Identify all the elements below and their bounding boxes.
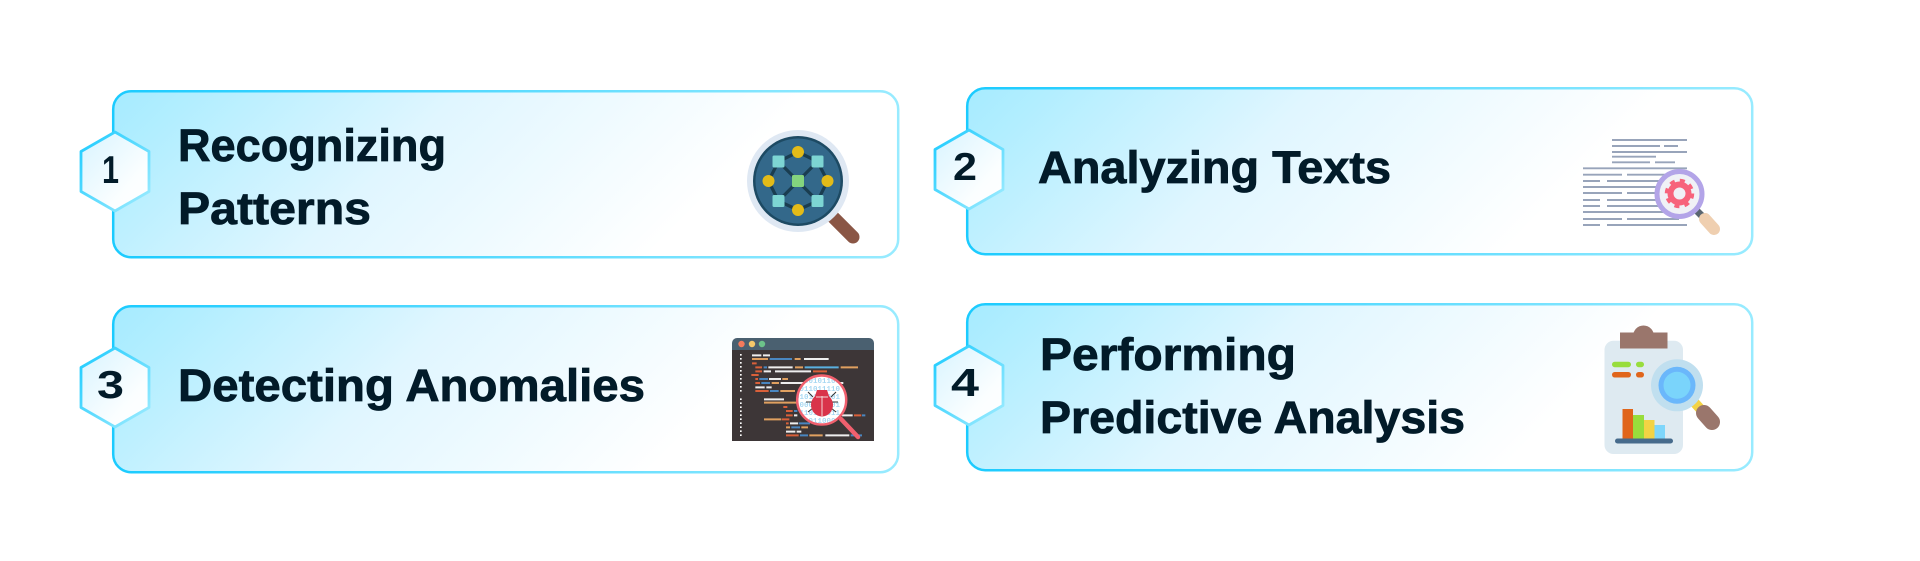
panel: performing predictive analysis — [935, 304, 1752, 470]
number badge 3: 3 — [97, 364, 124, 407]
heading: performing predictive analysis: Predictive Analysis — [1040, 392, 1465, 443]
icon: code window with bug under magnifier: 0110100011 — [795, 410, 841, 418]
heading: analyzing texts: Analyzing Texts — [1038, 142, 1391, 193]
icon: magnifier over network — [747, 130, 853, 237]
icon: code window with bug under magnifier — [732, 338, 874, 441]
icon: code window with bug under magnifier: 0100101100 — [795, 378, 841, 386]
heading: recognizing patterns: Recognizing — [178, 120, 446, 171]
icon: clipboard with bar chart and magnifier — [1604, 326, 1712, 454]
panel: recognizing patterns — [81, 91, 898, 257]
icon: document with magnifier and gear — [1583, 140, 1714, 229]
number badge 1 — [81, 132, 149, 211]
number badge 2 — [935, 130, 1003, 209]
card background — [967, 88, 1752, 254]
icon: code window with bug under magnifier: 1000010101 — [795, 402, 841, 410]
heading: recognizing patterns: Patterns — [178, 183, 371, 234]
number badge 1: 1 — [102, 149, 119, 192]
heading: recognizing patterns — [178, 120, 446, 234]
number badge 4 — [935, 346, 1003, 425]
icon: code window with bug under magnifier: 1010110000 — [795, 418, 841, 426]
number badge 3 — [81, 348, 149, 427]
icon: code window with bug under magnifier: 0101101001 — [795, 394, 841, 402]
panel: detecting anomalies — [81, 306, 898, 472]
icon: code window with bug under magnifier: 1011011110 — [795, 386, 841, 394]
panel: analyzing texts — [935, 88, 1752, 254]
card background — [967, 304, 1752, 470]
heading: performing predictive analysis — [1040, 329, 1465, 443]
heading: performing predictive analysis: Performing — [1040, 329, 1296, 380]
card background — [113, 91, 898, 257]
number badge 4: 4 — [951, 362, 979, 405]
heading: detecting anomalies: Detecting Anomalies — [178, 360, 645, 411]
number badge 2: 2 — [953, 146, 977, 189]
card background — [113, 306, 898, 472]
